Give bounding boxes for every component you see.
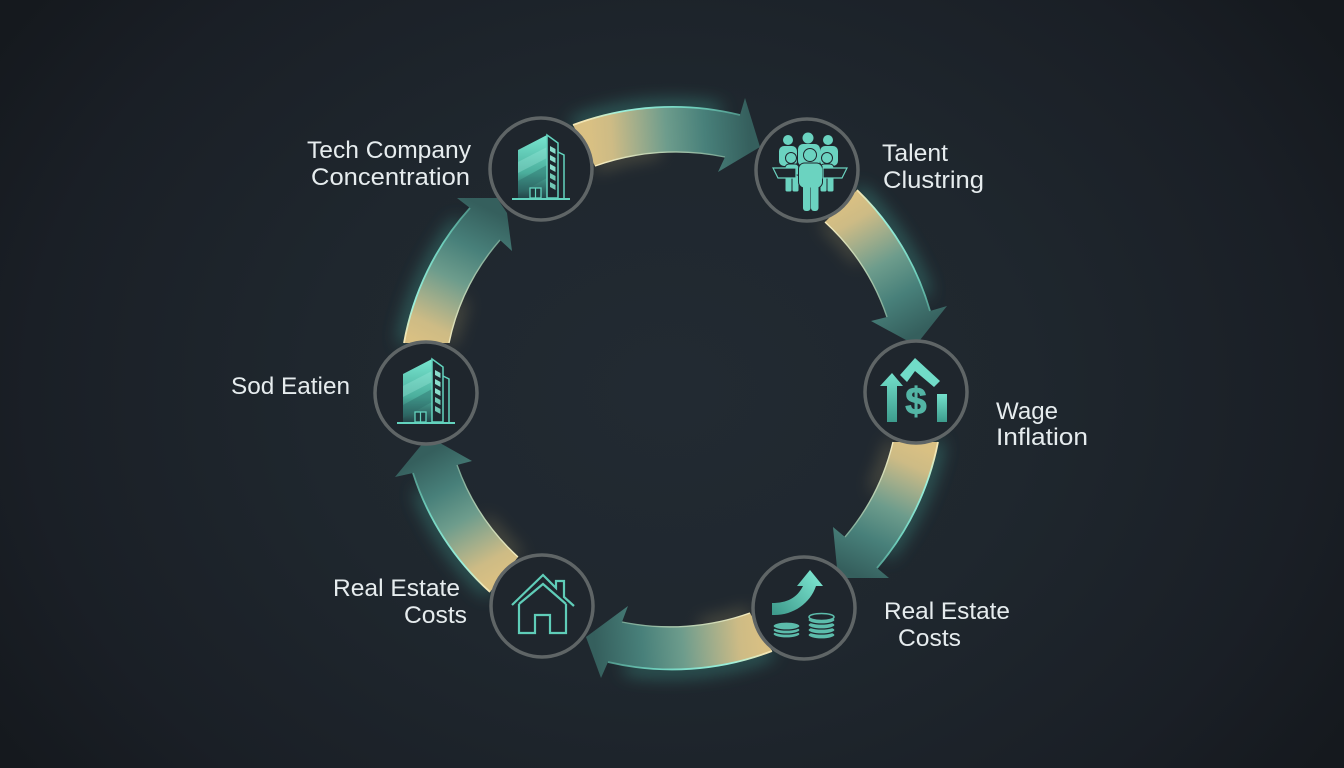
- label: real estate costs right: Real Estate: [884, 598, 1010, 625]
- icon: office building: [512, 135, 570, 199]
- arrow: real estate costs to home costs: [586, 606, 772, 678]
- label: real estate costs right: Costs: [898, 625, 961, 652]
- icon: house: [512, 575, 574, 633]
- node: sod eatien: [375, 342, 477, 444]
- arrow: tech company to talent clustering: [573, 98, 760, 172]
- label: tech company concentration: [307, 137, 471, 191]
- node: real estate costs right: [753, 557, 855, 659]
- label: tech company concentration: Concentration: [311, 164, 470, 191]
- icon: rising arrow and coins: [772, 570, 835, 639]
- icon: wage arrow, roof and dollar: $: [905, 381, 927, 423]
- node: talent clustering: [756, 119, 858, 221]
- label: wage inflation: Inflation: [996, 424, 1088, 451]
- label: talent clustring: Talent: [882, 140, 948, 167]
- arrow: wage inflation to real estate costs: [833, 442, 938, 578]
- node: real estate costs left: [491, 555, 593, 657]
- label: sod eatien: Sod Eatien: [231, 373, 350, 400]
- label: talent clustring: [882, 140, 984, 194]
- arrow: home costs to sod eatien: [395, 443, 518, 592]
- node: tech company: [490, 118, 592, 220]
- node: wage inflation: [865, 341, 967, 443]
- arrow: talent clustering to wage inflation: [825, 190, 947, 340]
- label: tech company concentration: Tech Company: [307, 137, 471, 164]
- label: real estate costs left: Real Estate: [333, 575, 460, 602]
- label: real estate costs left: [333, 575, 467, 629]
- icon: office building: [397, 359, 455, 423]
- label: talent clustring: Clustring: [883, 167, 984, 194]
- arrow: sod eatien to tech company: [404, 198, 512, 343]
- label: real estate costs left: Costs: [404, 602, 467, 629]
- icon: group of people: [773, 132, 847, 211]
- label: real estate costs right: [884, 598, 1010, 652]
- label: wage inflation: Wage: [996, 398, 1058, 425]
- label: wage inflation: [996, 398, 1088, 451]
